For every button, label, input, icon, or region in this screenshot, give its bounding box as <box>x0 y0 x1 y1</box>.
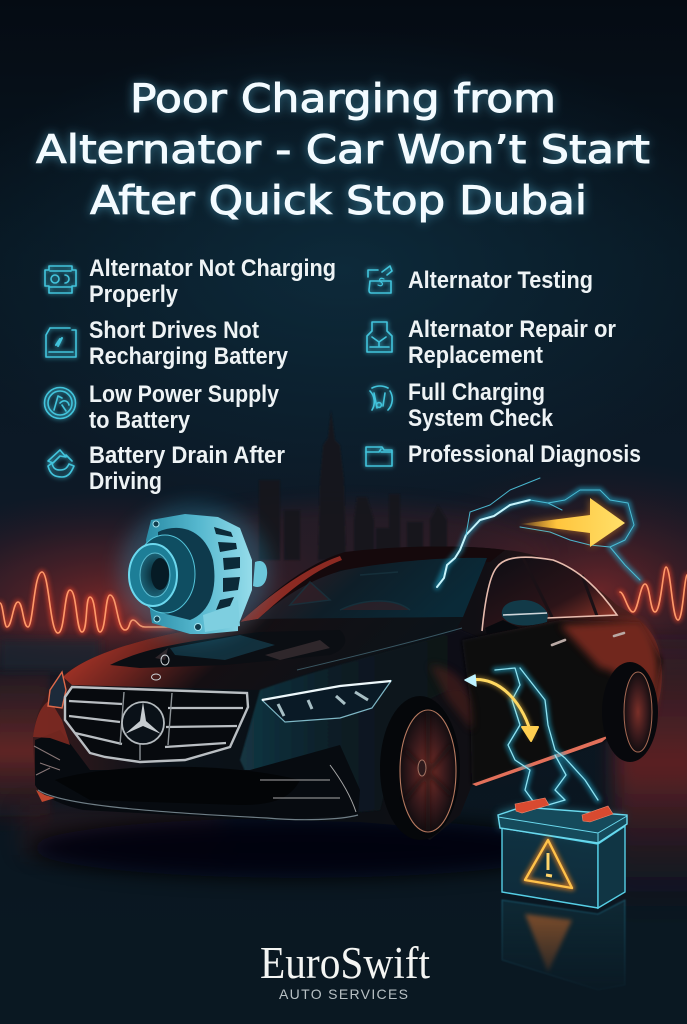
alternator cooling fins <box>214 527 240 610</box>
grille <box>65 687 248 762</box>
logo: EuroSwift <box>260 938 430 988</box>
text: alternator not charging <box>89 255 336 308</box>
text: alternator not charging: Properly <box>89 281 178 308</box>
title: Poor Charging from <box>130 77 556 122</box>
text: alternator testing: Alternator Testing <box>408 267 593 294</box>
title: After Quick Stop Dubai <box>90 179 587 224</box>
right headlight <box>262 681 391 722</box>
alternator inner dark <box>158 528 214 620</box>
hood ornament <box>152 655 169 680</box>
text: full charging: System Check <box>408 405 553 432</box>
left red bumper highlight <box>33 700 70 745</box>
text: repair <box>408 316 616 369</box>
text: repair: Alternator Repair or <box>408 316 616 343</box>
windshield <box>258 558 487 619</box>
battery reflection <box>502 900 625 990</box>
front wheel <box>380 696 460 840</box>
icon: short drives battery <box>46 328 76 357</box>
icon: diagnosis folder <box>366 447 392 466</box>
front fender <box>240 630 484 820</box>
yellow arrow <box>520 498 625 547</box>
text: low power <box>89 381 279 434</box>
warning triangle <box>525 840 572 888</box>
alternator mounting bolts <box>153 521 202 630</box>
side windows <box>483 557 617 630</box>
door handles <box>552 633 624 645</box>
rear wheel <box>602 662 658 762</box>
text: battery drain: Driving <box>89 468 162 495</box>
red waveform left <box>0 572 172 633</box>
list: causes (left column) <box>44 255 336 495</box>
text: repair: Replacement <box>408 342 543 369</box>
text: full charging: Full Charging <box>408 379 545 406</box>
icon: alternator testing <box>368 266 392 293</box>
battery with warning <box>498 798 627 908</box>
text: alternator not charging: Alternator Not Charging <box>89 255 336 282</box>
text: battery drain: Battery Drain After <box>89 442 285 469</box>
text: low power: Low Power Supply <box>89 381 279 408</box>
battery lid <box>498 807 627 843</box>
text: short drives: Short Drives Not <box>89 317 259 344</box>
alternator housing <box>146 514 252 634</box>
lightning upper <box>437 478 640 587</box>
sill highlight <box>472 735 610 786</box>
lightning lower <box>495 668 598 808</box>
battery terminals <box>515 798 613 822</box>
alternator front ring <box>129 535 195 613</box>
text: battery drain <box>89 442 285 495</box>
title: Alternator - Car Won’t Start <box>36 128 650 173</box>
hood <box>63 617 463 690</box>
city skyline <box>259 410 447 560</box>
left headlight <box>48 672 66 708</box>
mercedes-style star emblem <box>122 702 164 744</box>
red waveform right <box>620 567 687 620</box>
alternator rear pulley <box>253 561 267 587</box>
lower bumper <box>35 730 360 820</box>
text: full charging <box>408 379 553 432</box>
wing mirror <box>485 600 548 634</box>
roof and a-pillar <box>240 546 505 622</box>
icon: low power gauge <box>44 388 76 418</box>
logo: AUTO SERVICES <box>279 986 408 1002</box>
icon: battery drain arrows <box>48 450 74 477</box>
car <box>33 546 662 840</box>
title <box>36 77 650 224</box>
door panels <box>462 620 662 785</box>
text: short drives: Recharging Battery <box>89 343 288 370</box>
icon: full charging system <box>370 386 392 410</box>
battery front and side <box>502 828 598 908</box>
car body <box>33 547 662 840</box>
window chrome <box>482 557 617 631</box>
text: professional diagnosis: Professional Diagnosis <box>408 441 641 468</box>
text: short drives <box>89 317 288 370</box>
text: low power: to Battery <box>89 407 190 434</box>
list: solutions (right column) <box>366 266 641 468</box>
floor reflections <box>0 625 687 1024</box>
curved yellow arrow <box>465 675 538 741</box>
icon: alternator <box>45 266 76 293</box>
alternator <box>120 504 270 640</box>
icon: repair <box>367 322 392 352</box>
